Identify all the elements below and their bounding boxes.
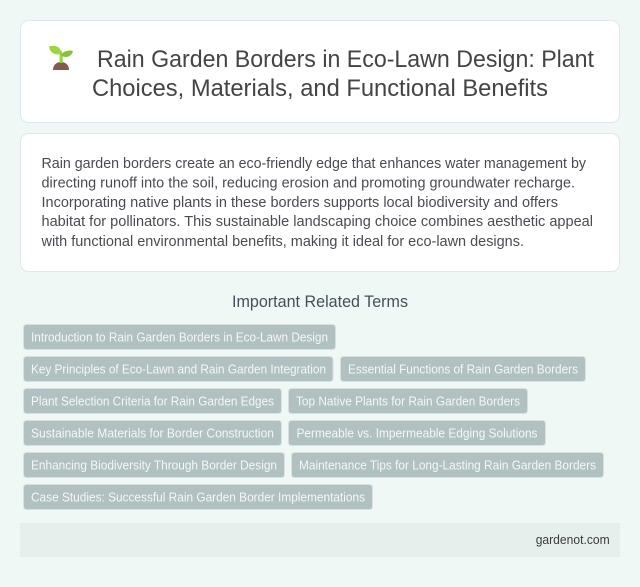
chip: top native plants <box>288 388 528 414</box>
chip: introduction: Introduction to Rain Garden Borders in Eco-Lawn Design <box>31 330 328 344</box>
text block: description: with functional environmental benefits, making it ideal for eco-lawn designs. <box>41 233 524 250</box>
panel: title card <box>20 20 620 122</box>
panel: related terms chips <box>24 324 604 510</box>
chip: maintenance tips <box>292 452 604 478</box>
panel: description card <box>20 134 620 272</box>
chip: plant selection <box>24 388 282 414</box>
chip: introduction <box>24 324 336 350</box>
chip: enhancing biodiversity <box>24 452 284 478</box>
title: Choices, Materials, and Functional Benefits <box>92 75 548 102</box>
chip: permeable vs impermeable: Permeable vs. Impermeable Edging Solutions <box>296 426 538 440</box>
title: Rain Garden Borders in Eco-Lawn Design: Plant <box>97 46 594 73</box>
text block: description: Incorporating native plants in these borders supports local biodiversity and offers <box>42 194 558 211</box>
text block: description: habitat for pollinators. This sustainable landscaping choice combines aesthetic appeal <box>42 213 593 230</box>
chip: key principles <box>24 356 333 382</box>
icon: seedling <box>49 46 73 70</box>
footer source text: gardenot.com <box>536 532 610 547</box>
panel: footer <box>20 523 620 557</box>
chip: maintenance tips: Maintenance Tips for Long-Lasting Rain Garden Borders <box>299 458 596 472</box>
chip: case studies: Case Studies: Successful Rain Garden Border Implementations <box>31 490 365 504</box>
chip: essential functions <box>340 356 586 382</box>
chip: plant selection: Plant Selection Criteria for Rain Garden Edges <box>31 394 274 408</box>
title <box>92 46 594 102</box>
text block: description: directing runoff into the soil, reducing erosion and promoting groundwater recharge. <box>42 174 575 192</box>
heading: important related terms: Important Related Terms <box>232 293 408 311</box>
chip: enhancing biodiversity: Enhancing Biodiversity Through Border Design <box>31 458 277 472</box>
text block: description <box>41 155 593 250</box>
chip: sustainable materials: Sustainable Materials for Border Construction <box>31 426 274 440</box>
text block: description: Rain garden borders create an eco-friendly edge that enhances water management by <box>42 155 586 172</box>
chip: essential functions: Essential Functions of Rain Garden Borders <box>348 362 578 376</box>
chip: key principles: Key Principles of Eco-Lawn and Rain Garden Integration <box>31 362 326 376</box>
chip: top native plants: Top Native Plants for Rain Garden Borders <box>296 394 520 408</box>
chip: sustainable materials <box>24 420 282 446</box>
chip: permeable vs impermeable <box>288 420 546 446</box>
chip: case studies <box>24 484 372 510</box>
